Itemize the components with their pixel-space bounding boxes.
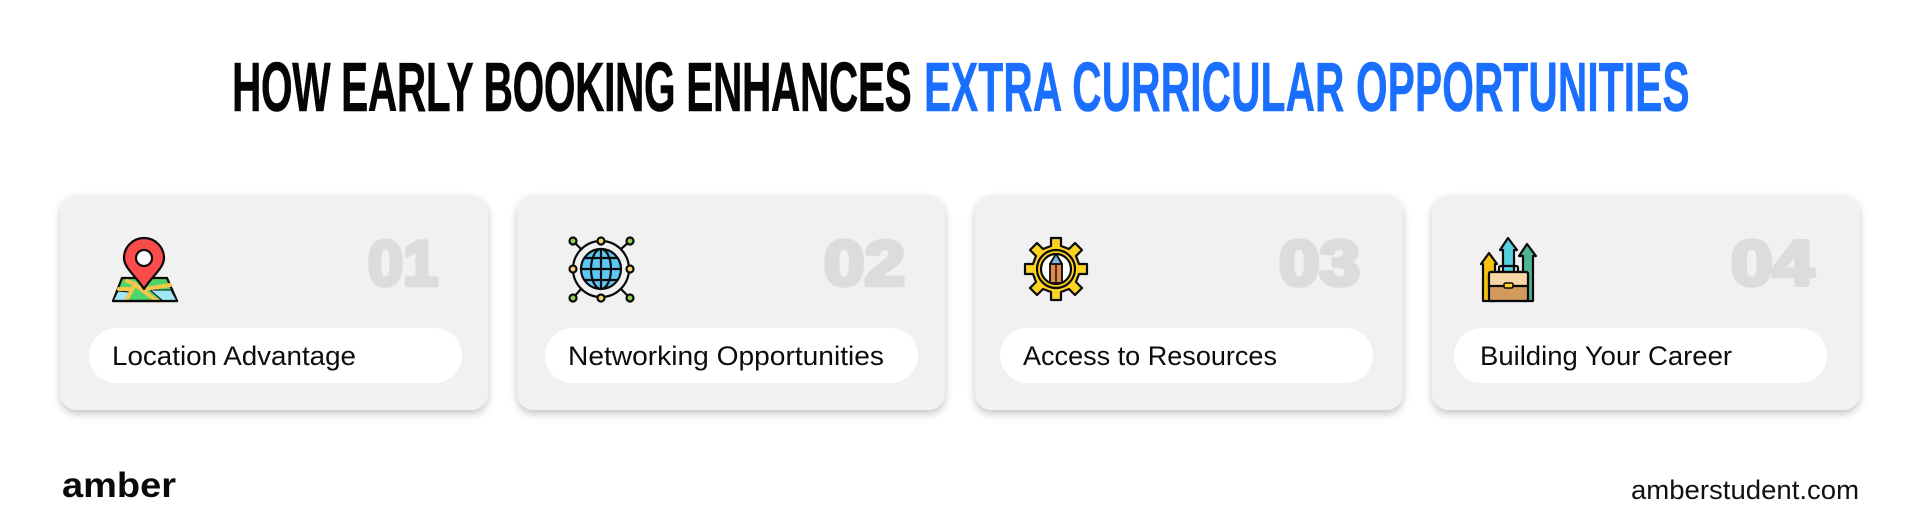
logo: amber: amber	[62, 466, 176, 505]
icon: briefcase with arrows	[1481, 238, 1536, 301]
panel: access to resources	[975, 195, 1403, 410]
label pill	[1000, 328, 1373, 383]
panel: networking opportunities	[517, 195, 945, 410]
label pill: Networking Opportunities	[568, 341, 884, 371]
title: EXTRA CURRICULAR OPPORTUNITIES	[924, 49, 1690, 127]
panel: location advantage	[60, 195, 488, 410]
panel: building your career	[1432, 195, 1860, 410]
number 04: 04	[1731, 229, 1814, 299]
number 03: 03	[1279, 229, 1360, 299]
label pill: Access to Resources	[1023, 341, 1277, 371]
label pill: Location Advantage	[112, 341, 356, 371]
label pill	[545, 328, 918, 383]
label pill	[1454, 328, 1827, 383]
number 01: 01	[368, 229, 438, 299]
label pill	[89, 328, 462, 383]
title: HOW EARLY BOOKING ENHANCES	[232, 49, 912, 127]
icon: globe network	[570, 238, 634, 302]
website url: amberstudent.com	[1631, 475, 1859, 505]
icon: map pin	[113, 238, 177, 301]
number 02: 02	[824, 229, 905, 299]
title	[232, 49, 1690, 127]
icon: gear with pencil	[1025, 238, 1087, 300]
label pill: Building Your Career	[1480, 341, 1732, 371]
